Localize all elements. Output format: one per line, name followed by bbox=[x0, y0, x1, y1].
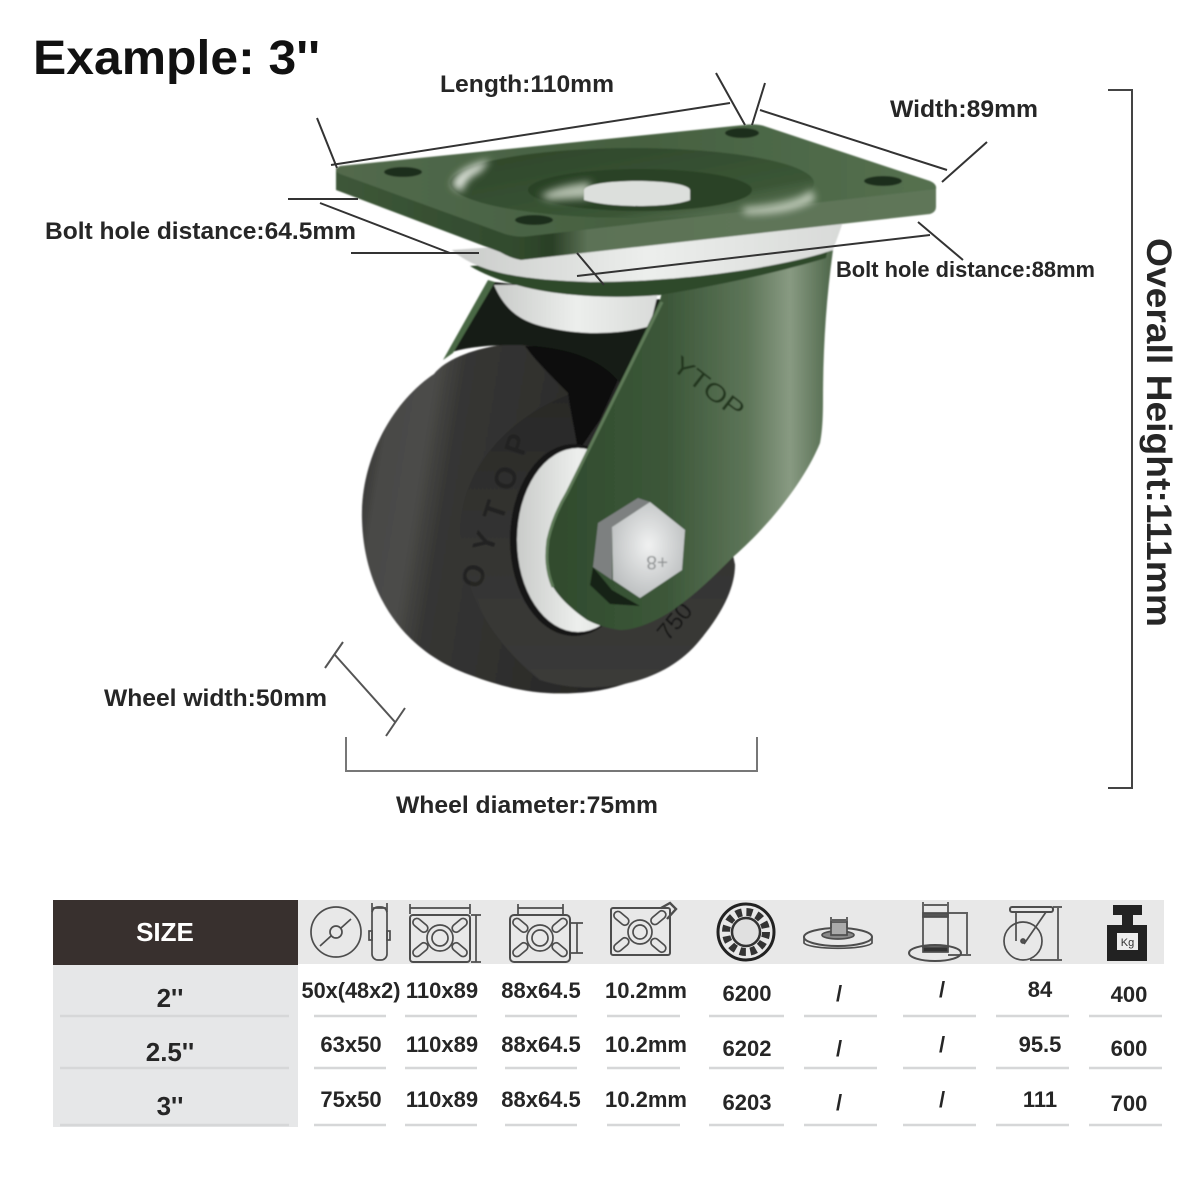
row: 2.5 inch: / bbox=[939, 1032, 945, 1057]
row: 3 inch bbox=[157, 1087, 1147, 1121]
fork interior shadow bbox=[452, 282, 665, 395]
row: 3 inch: 111 bbox=[1023, 1087, 1057, 1112]
axle bolt: +8 bbox=[646, 551, 668, 572]
row: 2.5 inch: 10.2mm bbox=[605, 1032, 687, 1057]
wheel: 750 bbox=[652, 598, 698, 646]
dimension: bolt hole distance 64.5: Bolt hole distance:64.5mm bbox=[45, 218, 356, 245]
size header cell bbox=[53, 900, 298, 965]
row: 3 inch: / bbox=[836, 1090, 842, 1115]
dimension: overall height: Overall Height:111mm bbox=[1139, 238, 1178, 627]
icon: wheel width bbox=[369, 903, 390, 960]
icon: bearing bbox=[718, 904, 774, 960]
icon: weight capacity bbox=[1107, 905, 1147, 961]
icon: bolt hole spacing bbox=[510, 904, 583, 962]
dimension: bolt hole distance 64.5 bbox=[45, 199, 479, 253]
icon: wheel diameter bbox=[311, 907, 361, 957]
axle bolt bbox=[590, 498, 685, 606]
row: 2 inch: / bbox=[939, 977, 945, 1002]
icon: overall height bbox=[1004, 907, 1062, 960]
row: 2 inch: 2'' bbox=[157, 983, 183, 1013]
dimension: wheel width: Wheel width:50mm bbox=[104, 685, 327, 712]
row: 2.5 inch: 6202 bbox=[723, 1036, 771, 1061]
row: 3 inch: 75x50 bbox=[320, 1087, 382, 1112]
row: 2.5 inch bbox=[146, 1032, 1147, 1067]
dimension: overall height bbox=[1108, 90, 1178, 788]
dimension: width: Width:89mm bbox=[890, 96, 1038, 123]
row dividers bbox=[60, 1016, 1162, 1125]
row: 2.5 inch: 600 bbox=[1111, 1036, 1147, 1061]
row: 3 inch: 88x64.5 bbox=[501, 1087, 581, 1112]
green bearing collar bbox=[470, 238, 830, 297]
row: 2.5 inch: 95.5 bbox=[1019, 1032, 1061, 1057]
row: 2 inch: 88x64.5 bbox=[501, 978, 581, 1003]
row: 2 inch: 50x(48x2) bbox=[302, 978, 400, 1003]
spec table bbox=[53, 900, 1164, 1127]
icon: mounting bolt size bbox=[611, 903, 676, 955]
icon: swivel plate with stem bbox=[804, 917, 872, 948]
row: 3 inch: 700 bbox=[1111, 1091, 1147, 1116]
row: 2 inch: / bbox=[836, 981, 842, 1006]
left fork arm bbox=[443, 280, 495, 360]
row: 2.5 inch: / bbox=[836, 1036, 842, 1061]
row: 2.5 inch: 2.5'' bbox=[146, 1037, 194, 1067]
size column background bbox=[53, 965, 298, 1127]
icon: stem height bbox=[909, 902, 971, 961]
icon: plate size bbox=[410, 904, 481, 962]
row: 2.5 inch: 88x64.5 bbox=[501, 1032, 581, 1057]
dimension: wheel diameter: Wheel diameter:75mm bbox=[396, 792, 658, 819]
dimension: wheel width bbox=[104, 642, 405, 736]
row: 3 inch: 110x89 bbox=[406, 1087, 478, 1112]
wheel: OYTOP bbox=[455, 430, 536, 592]
dimension: width bbox=[760, 96, 1038, 182]
row: 2 inch: 6200 bbox=[723, 981, 771, 1006]
dimension: wheel diameter bbox=[346, 737, 757, 819]
wheel bbox=[362, 345, 735, 693]
caster illustration bbox=[336, 124, 936, 693]
table header strip bbox=[298, 900, 1164, 964]
dimension: length bbox=[317, 71, 765, 168]
row: 2 inch bbox=[157, 977, 1147, 1013]
size header cell: SIZE bbox=[136, 917, 194, 947]
nylon bearing cylinder bbox=[494, 285, 660, 333]
fork embossed brand: YTOP bbox=[666, 351, 750, 424]
fork front rim bbox=[547, 302, 662, 587]
title: Example: 3'' bbox=[33, 32, 320, 85]
fork body bbox=[547, 250, 833, 630]
plate bolt holes bbox=[384, 167, 422, 177]
row: 3 inch: / bbox=[939, 1087, 945, 1112]
mounting plate bbox=[336, 124, 936, 260]
row: 2.5 inch: 63x50 bbox=[320, 1032, 382, 1057]
row: 2 inch: 10.2mm bbox=[605, 978, 687, 1003]
row: 3 inch: 6203 bbox=[723, 1090, 771, 1115]
white washer ring bbox=[452, 222, 843, 282]
row: 2 inch: 400 bbox=[1111, 982, 1147, 1007]
dimension: length: Length:110mm bbox=[440, 71, 614, 98]
row: 2 inch: 110x89 bbox=[406, 978, 478, 1003]
center pivot cap bbox=[584, 181, 690, 206]
dimension: bolt hole distance 88: Bolt hole distance:88mm bbox=[836, 257, 1095, 282]
row: 3 inch: 3'' bbox=[157, 1091, 183, 1121]
plate recess bbox=[450, 148, 814, 218]
row: 3 inch: 10.2mm bbox=[605, 1087, 687, 1112]
row: 2.5 inch: 110x89 bbox=[406, 1032, 478, 1057]
wheel hub bbox=[517, 448, 639, 632]
dimension: bolt hole distance 88 bbox=[577, 222, 1095, 285]
icon: weight capacity: Kg bbox=[1121, 937, 1134, 949]
row: 2 inch: 84 bbox=[1028, 977, 1053, 1002]
